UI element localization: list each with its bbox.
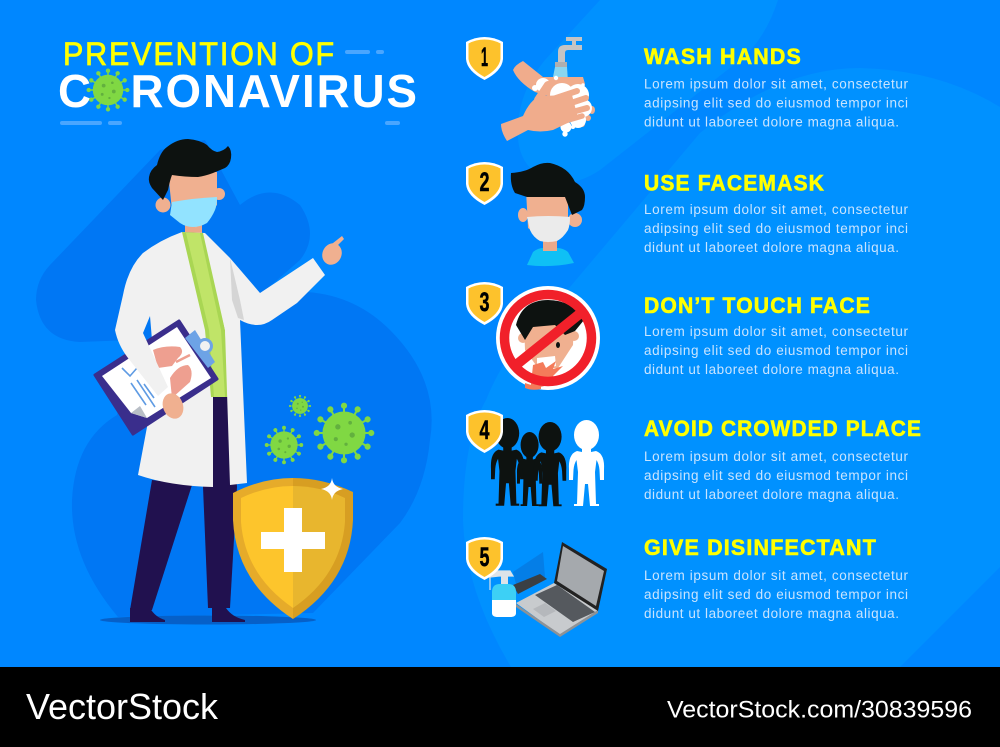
clip	[185, 330, 215, 368]
badge 2	[466, 162, 503, 205]
trousers	[130, 390, 245, 622]
ground shadow	[100, 616, 316, 624]
clipboard	[95, 321, 217, 434]
footer bar	[0, 667, 1000, 747]
body text: didunt ut laboreet dolore magna aliqua.	[644, 362, 899, 377]
shield with cross	[233, 478, 353, 619]
faucet	[555, 37, 582, 67]
step 1: wash hands	[466, 37, 908, 141]
footer logo: VectorStock	[26, 686, 219, 727]
icon: no touching face sign	[496, 286, 600, 390]
body text	[644, 202, 908, 255]
body text: adipsing elit sed do eiusmod tempor inci	[644, 96, 908, 110]
title line: prevention of: PREVENTION OF	[63, 36, 336, 72]
body text: Lorem ipsum dolor sit amet, consectetur	[644, 324, 908, 339]
neck and face	[156, 172, 225, 238]
body text: Lorem ipsum dolor sit amet, consectetur	[644, 202, 908, 217]
sparkle	[321, 478, 343, 500]
icon: face with mask	[511, 163, 585, 266]
back hand	[513, 61, 585, 100]
icon: crowd silhouettes	[491, 418, 604, 506]
foam	[532, 76, 592, 137]
pointing hand	[319, 236, 345, 268]
badge 4: 4	[480, 415, 490, 445]
heading: USE FACEMASK	[644, 170, 825, 196]
coat fold shadow	[230, 258, 244, 320]
body text: adipsing elit sed do eiusmod tempor inci	[644, 221, 908, 236]
body text	[644, 324, 908, 377]
left hand	[159, 390, 187, 422]
body text: didunt ut laboreet dolore magna aliqua.	[644, 114, 899, 130]
heading: DON’T TOUCH FACE	[644, 293, 871, 318]
title line: coronavirus: CORONAVIRUS	[58, 65, 419, 117]
badge 3: 3	[480, 287, 490, 317]
background shape: right lighter area	[463, 68, 1000, 667]
body text: Lorem ipsum dolor sit amet, consectetur	[644, 449, 908, 464]
doctor illustration	[95, 139, 345, 624]
viruses	[265, 395, 374, 464]
badge 2: 2	[480, 167, 490, 197]
heading: WASH HANDS	[644, 44, 802, 69]
footer url: VectorStock.com/30839596	[667, 696, 972, 724]
body text: adipsing elit sed do eiusmod tempor inci	[644, 343, 908, 358]
badge 1	[466, 37, 503, 80]
step 5: give disinfectant	[466, 535, 908, 637]
title dashes	[60, 50, 400, 125]
lab coat body	[125, 232, 231, 487]
icon: title virus	[87, 69, 129, 111]
icon: hand washing	[501, 37, 595, 141]
body text	[644, 76, 908, 130]
face mask	[170, 197, 217, 227]
icon: laptop, phone and sanitizer	[489, 542, 607, 637]
body text	[644, 449, 908, 502]
badge 3	[466, 282, 503, 325]
badge 4	[466, 410, 503, 453]
body text: adipsing elit sed do eiusmod tempor inci	[644, 587, 908, 602]
cross	[261, 508, 325, 572]
hair	[149, 139, 231, 200]
water	[550, 67, 568, 92]
title	[58, 36, 419, 125]
shirt	[182, 232, 229, 397]
heading: GIVE DISINFECTANT	[644, 535, 877, 560]
lungs drawing	[153, 346, 192, 398]
badge 5	[466, 537, 503, 580]
step 4: avoid crowded place	[466, 410, 922, 506]
coat right flap and pointing arm	[205, 233, 325, 485]
body text: Lorem ipsum dolor sit amet, consectetur	[644, 76, 908, 92]
step 3: don't touch face	[466, 282, 908, 390]
front hand	[501, 95, 578, 141]
body text: didunt ut laboreet dolore magna aliqua.	[644, 240, 899, 255]
body text: didunt ut laboreet dolore magna aliqua.	[644, 606, 899, 621]
background shape: top lighter blob	[518, 0, 778, 182]
body text: Lorem ipsum dolor sit amet, consectetur	[644, 568, 908, 583]
badge 5: 5	[480, 542, 490, 572]
left arm	[115, 253, 168, 396]
heading: AVOID CROWDED PLACE	[644, 416, 922, 441]
background shape: left darker blob	[36, 140, 432, 617]
badge 1: 1	[481, 42, 488, 72]
body text: adipsing elit sed do eiusmod tempor inci	[644, 468, 908, 483]
body text	[644, 568, 908, 621]
body text: didunt ut laboreet dolore magna aliqua.	[644, 487, 899, 502]
step 2: use facemask	[466, 162, 908, 266]
